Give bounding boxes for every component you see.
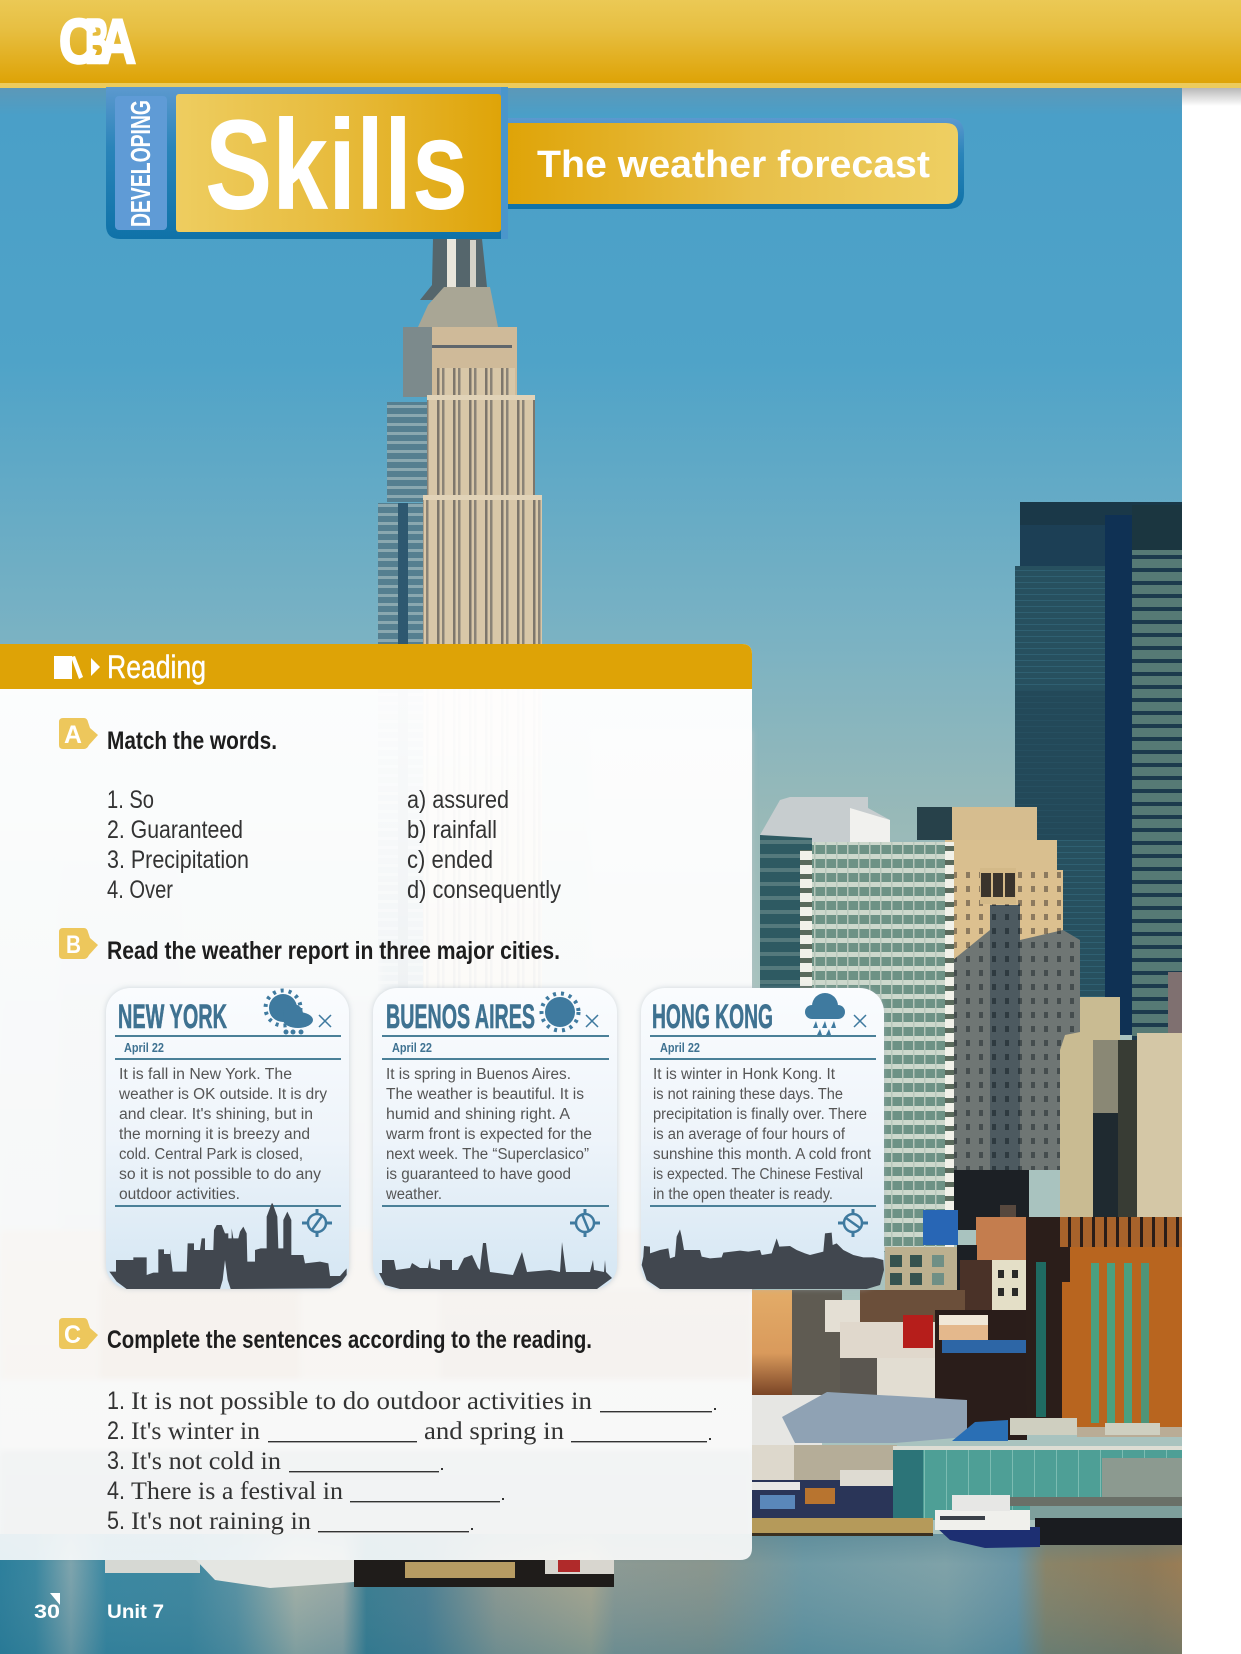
card: New York — [106, 988, 349, 1289]
logo CBA: C — [59, 7, 97, 77]
card: Buenos Aires — [373, 988, 617, 1289]
city name: BUENOS AIRES — [386, 998, 535, 1036]
sentence 2: 2. — [107, 1417, 125, 1445]
page number: 30 — [34, 1602, 60, 1623]
mid-rise block behind billboard — [954, 1170, 1029, 1310]
logo CBA: B — [85, 7, 109, 77]
report text — [385, 1066, 592, 1203]
tan building — [917, 807, 1080, 1170]
definitions list — [407, 786, 561, 904]
badge A: A — [64, 721, 82, 749]
label: Developing: DEVELOPING — [125, 100, 156, 227]
word list — [107, 786, 249, 904]
title block: Developing Skills — [106, 87, 508, 239]
sentence 2 — [107, 1417, 711, 1445]
report text: sunshine this month. A cold front — [653, 1146, 872, 1163]
badge C — [59, 1318, 98, 1349]
skyline: New York — [109, 1203, 347, 1289]
rules — [650, 1035, 876, 1207]
page number — [34, 1593, 60, 1623]
definitions list: a) assured — [407, 786, 509, 814]
icon: close — [854, 1015, 866, 1027]
ghost buildings behind panel — [0, 730, 752, 1560]
sentence 5: 5. — [107, 1507, 125, 1535]
sentence 2: It's winter in — [131, 1418, 261, 1445]
report text: outdoor activities. — [119, 1186, 240, 1203]
report text — [118, 1066, 327, 1203]
logo CBA — [59, 7, 136, 77]
water — [0, 1534, 1182, 1654]
sentence 5 — [107, 1507, 473, 1535]
margin shadow — [1182, 88, 1241, 106]
icon: arrow — [91, 658, 100, 676]
panel: reading — [0, 644, 752, 1560]
report text: in the open theater is ready. — [653, 1186, 833, 1203]
definitions list: d) consequently — [407, 876, 561, 904]
sentence 3: It's not cold in — [131, 1448, 282, 1475]
word list: 2. Guaranteed — [107, 816, 243, 844]
header bar — [0, 0, 1241, 88]
icon: close — [586, 1015, 598, 1027]
city name: HONG KONG — [652, 998, 773, 1036]
reading header — [0, 644, 752, 689]
title tab: The weather forecast — [500, 118, 964, 209]
badge B: B — [66, 931, 81, 959]
glass tower — [760, 797, 960, 1291]
report text: precipitation is finally over. There — [653, 1106, 867, 1123]
waterfront roof — [752, 1392, 1182, 1445]
sentence 4: 4. — [107, 1477, 125, 1505]
word list: 4. Over — [107, 876, 173, 904]
instruction C: Complete the sentences according to the reading. — [107, 1326, 592, 1354]
report text: humid and shining right. A — [386, 1106, 571, 1123]
sentence 1: 1. — [107, 1387, 125, 1415]
section A — [59, 718, 561, 904]
pier — [752, 1518, 933, 1536]
mixed harbour buildings — [752, 1445, 897, 1520]
report text: is an average of four hours of — [653, 1126, 846, 1143]
water shading — [0, 1534, 1182, 1654]
label: Developing — [115, 96, 167, 230]
report text: cold. Central Park is closed, — [119, 1146, 303, 1163]
city name: NEW YORK — [118, 998, 227, 1036]
report text: It is winter in Honk Kong. It — [653, 1066, 836, 1083]
icon: compass — [570, 1209, 600, 1237]
teal terminal — [893, 1446, 1182, 1520]
icon: rain cloud — [805, 993, 845, 1035]
report text: It is fall in New York. The — [119, 1066, 292, 1083]
icon: books — [54, 656, 83, 679]
report text: weather is OK outside. It is dry — [118, 1086, 327, 1103]
icon: close — [319, 1015, 331, 1027]
white page margin — [1182, 88, 1241, 1654]
sentence 1 — [107, 1387, 716, 1415]
word list: 3. Precipitation — [107, 846, 249, 874]
section C — [59, 1318, 716, 1535]
report text — [653, 1066, 872, 1203]
ferry — [935, 1495, 1040, 1548]
report text: is expected. The Chinese Festival — [653, 1166, 863, 1183]
sentence 2: and spring in — [424, 1418, 565, 1445]
report text: The weather is beautiful. It is — [386, 1086, 584, 1103]
report text: weather. — [385, 1186, 442, 1203]
report text: warm front is expected for the — [385, 1126, 592, 1143]
rules — [115, 1035, 341, 1207]
rules — [382, 1035, 609, 1207]
brick building — [1026, 1217, 1182, 1427]
unit label: Unit 7 — [107, 1602, 164, 1623]
report text: is not raining these days. The — [653, 1086, 843, 1103]
Empire State Building — [378, 239, 542, 1025]
report text: next week. The “Superclasico” — [386, 1146, 589, 1163]
title tab: The weather forecast: The weather forecast — [537, 144, 930, 186]
definitions list: b) rainfall — [407, 816, 497, 844]
logo CBA: A — [99, 7, 136, 77]
card: Hong Kong — [641, 988, 884, 1289]
red billboard — [903, 1315, 933, 1348]
icon: sun behind cloud — [266, 990, 313, 1034]
sentence 5: It's not raining in — [131, 1508, 312, 1535]
blue billboard — [923, 1210, 958, 1245]
skyline: Buenos Aires — [379, 1242, 612, 1289]
instruction A: Match the words. — [107, 727, 277, 755]
right pale building — [1060, 972, 1182, 1218]
section B — [59, 928, 560, 965]
blue skyscraper — [1015, 502, 1182, 1045]
date: April 22 — [660, 1040, 700, 1055]
sentence 4: There is a festival in — [131, 1478, 344, 1505]
icon: sun — [542, 994, 578, 1030]
report text: is guaranteed to have good — [386, 1166, 571, 1183]
badge C: C — [64, 1321, 81, 1349]
icon: compass — [838, 1209, 868, 1237]
icon: compass — [302, 1209, 332, 1237]
heading: Skills: Skills — [205, 94, 468, 237]
report text: It is spring in Buenos Aires. — [386, 1066, 571, 1083]
definitions list: c) ended — [407, 846, 493, 874]
report text: and clear. It's shining, but in — [119, 1106, 313, 1123]
instruction B: Read the weather report in three major cities. — [107, 937, 560, 965]
sentence 1: It is not possible to do outdoor activities in — [131, 1388, 593, 1415]
badge A — [59, 718, 98, 749]
sentence 3: 3. — [107, 1447, 125, 1475]
sentence 3 — [107, 1447, 443, 1475]
sentence 4 — [107, 1477, 504, 1505]
dock dark — [1035, 1518, 1182, 1545]
date: April 22 — [392, 1040, 432, 1055]
report text: the morning it is breezy and — [119, 1126, 310, 1143]
skyline: Hong Kong — [642, 1229, 884, 1289]
word list: 1. So — [107, 786, 154, 814]
boats under panel — [105, 1560, 614, 1588]
date: April 22 — [124, 1040, 164, 1055]
low buildings — [752, 1290, 1027, 1410]
reading header: Reading — [107, 649, 206, 685]
report text: so it is not possible to do any — [119, 1166, 321, 1183]
badge B — [59, 928, 98, 959]
